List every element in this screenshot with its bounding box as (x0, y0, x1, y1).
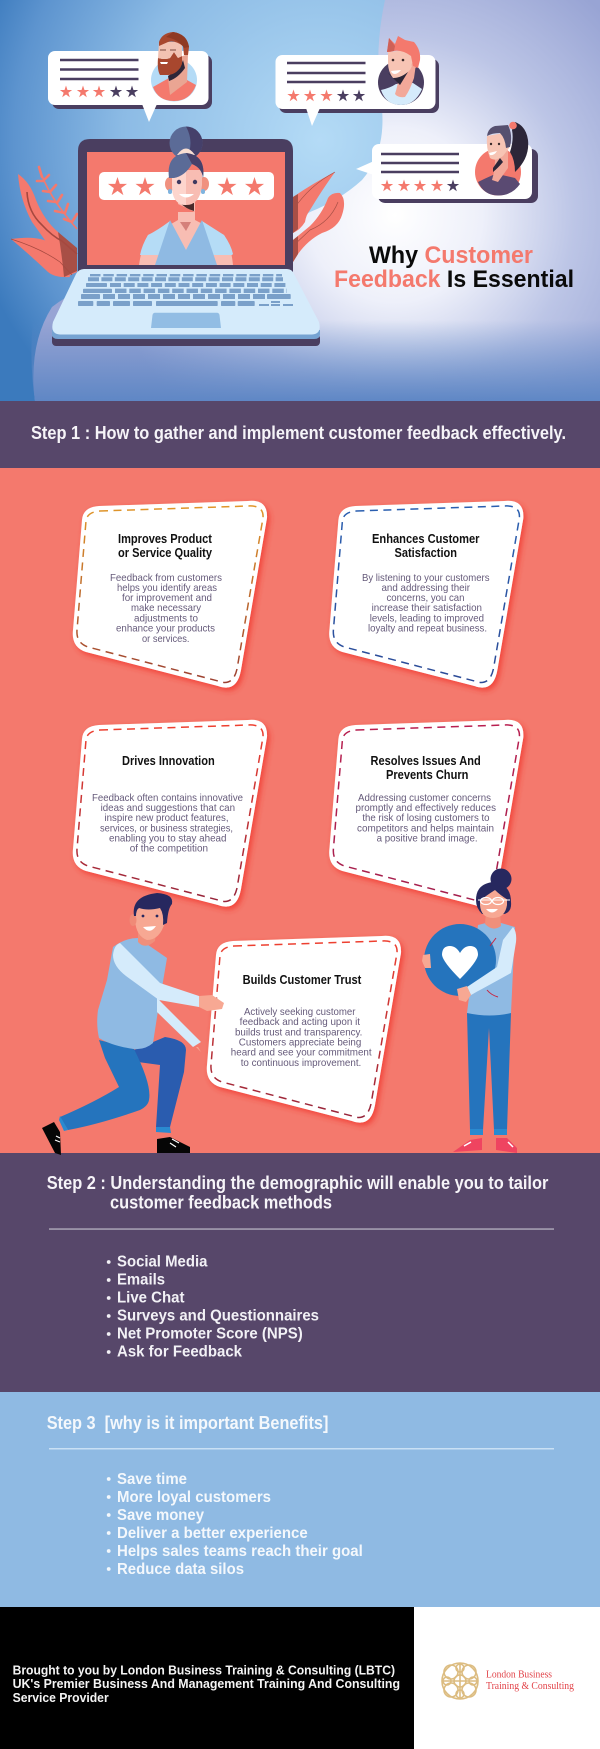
card: builds customer trust (207, 936, 401, 1123)
illustration: woman holding heart balloon (422, 868, 517, 1153)
card: builds customer trust: builds trust and transparency. (235, 1028, 362, 1038)
woman on screen (139, 126, 233, 265)
card: resolves issues: promptly and effectively reduces (356, 803, 496, 814)
card: improves product (73, 501, 267, 688)
card: improves product: for improvement and (122, 593, 212, 604)
step 3 list (107, 1471, 363, 1578)
hero background (0, 0, 600, 401)
avatar: man with coral hair (378, 36, 424, 105)
card: drives innovation: enabling you to stay ahead (109, 834, 227, 844)
card: resolves issues: competitors and helps maintain (357, 824, 494, 834)
step 2 heading: Step 2 : Understanding the demographic will enable you to tailor (47, 1173, 548, 1193)
step 3 list: Save time (117, 1471, 187, 1488)
avatar: bearded man (151, 32, 197, 102)
laptop base (52, 269, 320, 346)
title: Why Customer (369, 242, 533, 269)
card: drives innovation: Feedback often contains innovative (92, 793, 243, 804)
step 3 list: Helps sales teams reach their goal (117, 1543, 363, 1560)
card: drives innovation: ideas and suggestions that can (101, 803, 235, 814)
hair back (476, 882, 511, 914)
face (485, 912, 501, 929)
heart (442, 946, 478, 979)
card: drives innovation (73, 720, 267, 907)
arms (157, 998, 201, 1047)
glasses (478, 899, 510, 901)
card: enhances customer satisfaction: and addressing their (382, 583, 471, 594)
torso (467, 921, 515, 1016)
card: enhances customer satisfaction: By listening to your customers (362, 573, 490, 584)
card: builds customer trust: Actively seeking customer (244, 1007, 356, 1018)
title: Feedback Is Essential (334, 266, 574, 293)
footer: attribution (0, 1607, 414, 1749)
step 2 panel background (0, 1153, 600, 1392)
card: resolves issues (329, 720, 523, 907)
step 2 list: Emails (117, 1272, 165, 1289)
step 2 heading (47, 1173, 548, 1213)
step 3 list: Save money (117, 1507, 204, 1524)
footer: attribution: Service Provider (13, 1691, 109, 1705)
card: builds customer trust: Builds Customer Trust (243, 973, 362, 987)
card: enhances customer satisfaction: loyalty and repeat business. (368, 624, 487, 634)
step 2 list: Social Media (117, 1254, 208, 1271)
card: builds customer trust: feedback and acting upon it (240, 1017, 360, 1028)
step 3 list: Deliver a better experience (117, 1525, 308, 1542)
card: builds customer trust: heard and see your commitment (231, 1048, 372, 1058)
footer: attribution: UK's Premier Business And Management Training And Consulting (13, 1677, 400, 1691)
footer: logo (414, 1607, 600, 1749)
card: improves product: adjustments to (134, 614, 198, 624)
card: enhances customer satisfaction: Satisfaction (394, 546, 457, 560)
illustration: kneeling man (42, 893, 224, 1155)
hands and arm (422, 954, 431, 968)
review bubble 2 (276, 36, 439, 126)
footer: logo: Training & Consulting (486, 1681, 575, 1692)
neck and head (138, 930, 156, 946)
laptop screen (78, 139, 293, 272)
hand (199, 995, 224, 1011)
step 2 list: Surveys and Questionnaires (117, 1308, 319, 1325)
balloon (424, 924, 496, 996)
front leg (60, 1040, 149, 1130)
card: resolves issues: the risk of losing customers to (362, 813, 490, 824)
card: improves product: enhance your products (116, 624, 215, 634)
card: resolves issues: a positive brand image. (377, 834, 478, 844)
step 2 list (107, 1254, 319, 1361)
logo wordmark: London Business (486, 1670, 552, 1681)
footer: attribution: Brought to you by London Business Training & Consulting (LBTC) (13, 1663, 395, 1677)
step 3 panel (0, 1392, 600, 1607)
card: drives innovation: services, or business strategies, (100, 824, 233, 834)
avatar: woman with ponytail (475, 122, 528, 196)
card: enhances customer satisfaction: levels, leading to improved (370, 614, 484, 624)
illustration: decorative leaves left (11, 167, 77, 277)
card: builds customer trust: Customers appreciate being (239, 1038, 361, 1048)
review bubble 1 (48, 32, 212, 122)
keyboard (78, 275, 293, 306)
illustration: decorative leaves right (293, 172, 344, 262)
card: drives innovation: Drives Innovation (122, 754, 215, 768)
shoes (42, 1122, 61, 1155)
card: resolves issues: Resolves Issues And (370, 754, 481, 768)
card: drives innovation: inspire new product features, (104, 813, 228, 824)
illustration: laptop with woman on screen (52, 126, 320, 346)
trousers (467, 1013, 511, 1130)
card: improves product: or services. (142, 634, 190, 645)
torso (97, 938, 167, 1049)
trackpad (151, 313, 221, 328)
step 2 list: Ask for Feedback (117, 1344, 242, 1361)
card: enhances customer satisfaction: concerns, you can (386, 593, 465, 604)
card: improves product: make necessary (131, 603, 202, 614)
review bubble 3 (356, 122, 538, 203)
step 3 list: More loyal customers (117, 1489, 271, 1506)
logo emblem (442, 1663, 478, 1699)
back leg (134, 1037, 186, 1127)
card: improves product: Feedback from customers (110, 573, 222, 584)
card: improves product: helps you identify areas (117, 583, 217, 594)
card: improves product: or Service Quality (118, 546, 212, 560)
title (334, 242, 574, 293)
card: resolves issues: Prevents Churn (386, 768, 468, 782)
step 3 heading: Step 3 [why is it important Benefits] (47, 1413, 328, 1433)
card: enhances customer satisfaction: Enhances Customer (372, 532, 480, 546)
step 1 banner (0, 401, 600, 468)
step 2 list: Live Chat (117, 1290, 184, 1307)
card: resolves issues: Addressing customer concerns (358, 793, 491, 804)
step 2 heading: customer feedback methods (110, 1193, 332, 1213)
card: improves product: Improves Product (118, 532, 213, 546)
card: enhances customer satisfaction: increase their satisfaction (372, 603, 482, 614)
step 3 list: Reduce data silos (117, 1561, 244, 1578)
rating bar (99, 172, 274, 200)
card: drives innovation: of the competition (130, 844, 208, 854)
shoes (453, 1138, 482, 1152)
step 2 list: Net Promoter Score (NPS) (117, 1326, 303, 1343)
panel: coral cards section (0, 468, 600, 1153)
card: builds customer trust: to continuous improvement. (241, 1058, 361, 1069)
card: enhances customer satisfaction (329, 501, 523, 688)
